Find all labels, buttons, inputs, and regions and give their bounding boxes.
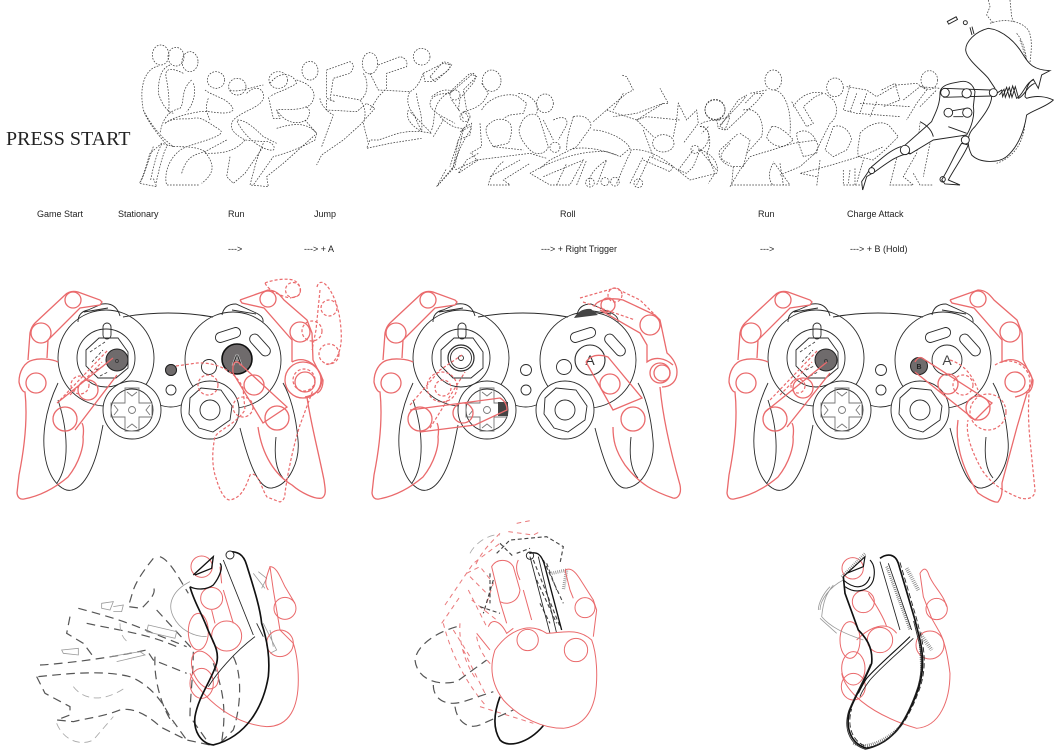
red hand: [186, 556, 298, 727]
figures, third section: [700, 70, 940, 187]
A button: A: [585, 352, 595, 368]
panel: controller 2 - roll: [372, 288, 680, 499]
left hand: [727, 291, 830, 499]
right trigger pressed: [574, 309, 598, 318]
move labels: [37, 209, 908, 254]
figures, first section: [139, 45, 478, 187]
right hand: [915, 290, 1035, 502]
figures, second section: [430, 62, 730, 188]
move labels: ---> + Right Trigger: [541, 244, 617, 254]
move labels: Stationary: [118, 209, 159, 219]
body and limbs: [903, 81, 975, 154]
A button pressed: [222, 344, 252, 374]
dark dashed motion: [415, 535, 567, 726]
A button: [575, 345, 605, 375]
A button: [932, 345, 962, 375]
move labels: Roll: [560, 209, 576, 219]
controller grip: [190, 551, 269, 745]
panel: controller 1 - jump: [17, 279, 341, 502]
stick pressed: o: [824, 358, 828, 365]
dashed shield ghost: [987, 0, 1031, 163]
move labels: Charge Attack: [847, 209, 904, 219]
stick pressed: [800, 342, 837, 376]
move labels: Run: [758, 209, 775, 219]
spring: [997, 80, 1035, 98]
stick column: [529, 553, 562, 630]
red hand: [840, 558, 950, 728]
D-pad right pressed: [498, 402, 508, 416]
grip line: [495, 697, 545, 744]
grey scribbles: [818, 553, 932, 745]
move labels: --->: [760, 244, 774, 254]
dashed hand motion: [176, 279, 341, 502]
red dashed motion: [442, 520, 540, 723]
left hand: [372, 291, 507, 499]
hand illustration 3: charge side view: [818, 553, 950, 749]
move labels: Game Start: [37, 209, 84, 219]
move labels: Run: [228, 209, 245, 219]
hand illustration 1: jump side view: [37, 551, 298, 745]
right hand: [233, 290, 325, 498]
A button pressed: A: [232, 352, 243, 369]
red hand: [477, 560, 597, 650]
ghost dashed motion: [37, 557, 240, 745]
hand illustration 2: roll side view: [415, 520, 597, 744]
panel: controller 3 - charge attack: [727, 290, 1035, 502]
B button pressed: B: [916, 364, 922, 371]
stick: [448, 345, 474, 371]
right hand: [580, 288, 680, 498]
palm blob: [492, 628, 597, 728]
start button: [166, 364, 176, 376]
figure sequence: dashed running poses: [139, 45, 940, 188]
character with shield: solid final pose: [862, 0, 1053, 190]
stick pressed: o: [115, 358, 119, 365]
title: PRESS START: [6, 128, 130, 150]
controller grip, multiple exposures: [843, 555, 924, 749]
move labels: Jump: [314, 209, 336, 219]
move labels: ---> + B (Hold): [850, 244, 908, 254]
move labels: --->: [228, 244, 242, 254]
debris: [947, 17, 958, 24]
stick pressed: [90, 342, 128, 376]
left hand: [17, 291, 117, 499]
shield: [966, 28, 1053, 161]
B button pressed: [910, 358, 928, 374]
grey palm arc: [171, 572, 277, 653]
A button: A: [942, 352, 952, 368]
move labels: ---> + A: [304, 244, 334, 254]
